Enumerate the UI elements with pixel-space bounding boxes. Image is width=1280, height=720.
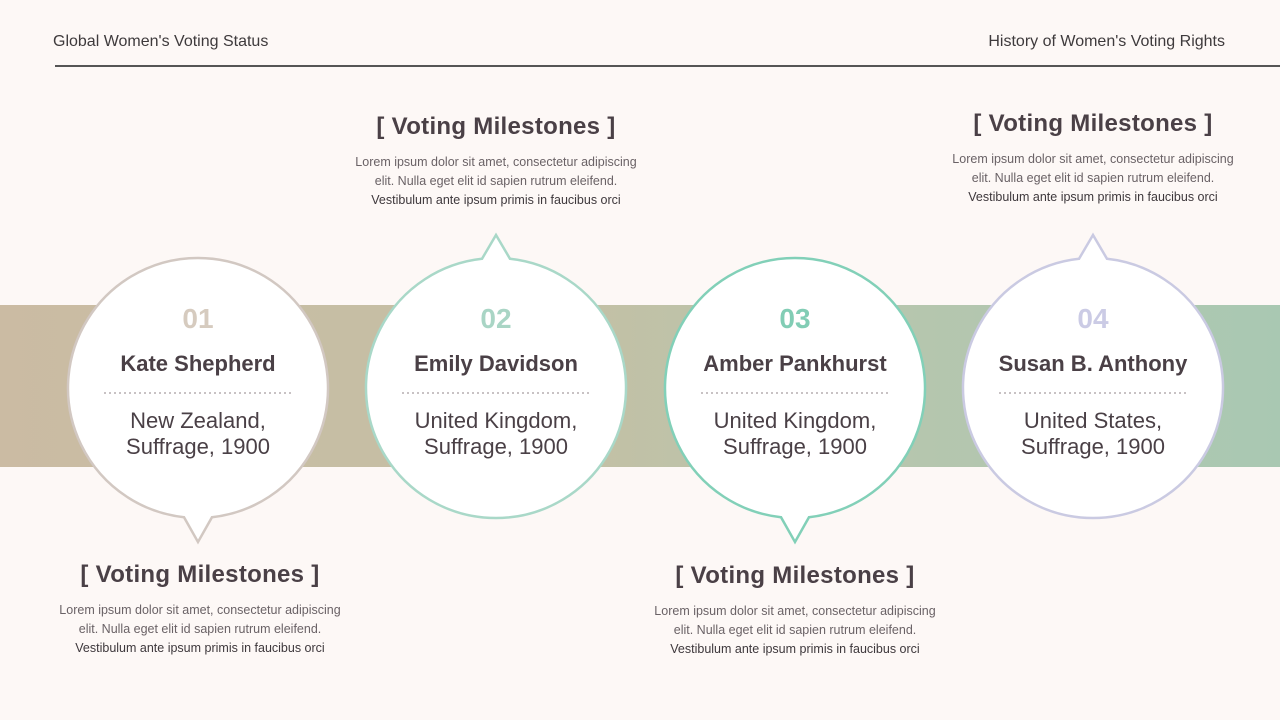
circle 02: Emily Davidson <box>414 351 578 376</box>
circle 03: Amber Pankhurst <box>703 351 887 376</box>
header left: Global Women's Voting Status <box>53 33 268 50</box>
circle 04: Suffrage, 1900 <box>1021 434 1165 459</box>
text block 01: elit. Nulla eget elit id sapien rutrum eleifend. <box>79 622 321 636</box>
text block 03: elit. Nulla eget elit id sapien rutrum eleifend. <box>674 623 916 637</box>
circle 04: Susan B. Anthony <box>999 351 1188 376</box>
text block 04: elit. Nulla eget elit id sapien rutrum eleifend. <box>972 171 1214 185</box>
text block 02 <box>355 113 637 207</box>
text block 01 <box>59 561 341 655</box>
circle 03: 03 <box>779 303 811 334</box>
circle 04: United States, <box>1024 408 1162 433</box>
circle 03: United Kingdom, <box>714 408 876 433</box>
text block 01: Lorem ipsum dolor sit amet, consectetur adipiscing <box>59 603 341 617</box>
circle 01: New Zealand, <box>130 408 266 433</box>
gradient band <box>0 305 1280 467</box>
circle 03 <box>665 258 925 542</box>
header right: History of Women's Voting Rights <box>988 33 1225 50</box>
text block 03: Lorem ipsum dolor sit amet, consectetur adipiscing <box>654 604 936 618</box>
circle 01: 01 <box>182 303 214 334</box>
text block 04: [ Voting Milestones ] <box>973 110 1213 137</box>
circle 02 <box>366 235 626 518</box>
circle 02: Suffrage, 1900 <box>424 434 568 459</box>
text block 04 <box>952 110 1234 204</box>
circle 01: Suffrage, 1900 <box>126 434 270 459</box>
text block 04: Lorem ipsum dolor sit amet, consectetur adipiscing <box>952 152 1234 166</box>
circle 04: 04 <box>1077 303 1109 334</box>
circle 02: 02 <box>480 303 512 334</box>
text block 01: [ Voting Milestones ] <box>80 561 320 588</box>
text block 03 <box>654 562 936 656</box>
circle 03: Suffrage, 1900 <box>723 434 867 459</box>
text block 01: Vestibulum ante ipsum primis in faucibus orci <box>75 641 325 655</box>
text block 03: Vestibulum ante ipsum primis in faucibus orci <box>670 642 920 656</box>
circle 04 <box>963 235 1223 518</box>
text block 02: Vestibulum ante ipsum primis in faucibus orci <box>371 193 621 207</box>
text block 02: [ Voting Milestones ] <box>376 113 616 140</box>
circle 01: Kate Shepherd <box>120 351 276 376</box>
text block 03: [ Voting Milestones ] <box>675 562 915 589</box>
text block 02: elit. Nulla eget elit id sapien rutrum eleifend. <box>375 174 617 188</box>
text block 02: Lorem ipsum dolor sit amet, consectetur adipiscing <box>355 155 637 169</box>
circle 01 <box>68 258 328 542</box>
circle 02: United Kingdom, <box>415 408 577 433</box>
text block 04: Vestibulum ante ipsum primis in faucibus orci <box>968 190 1218 204</box>
